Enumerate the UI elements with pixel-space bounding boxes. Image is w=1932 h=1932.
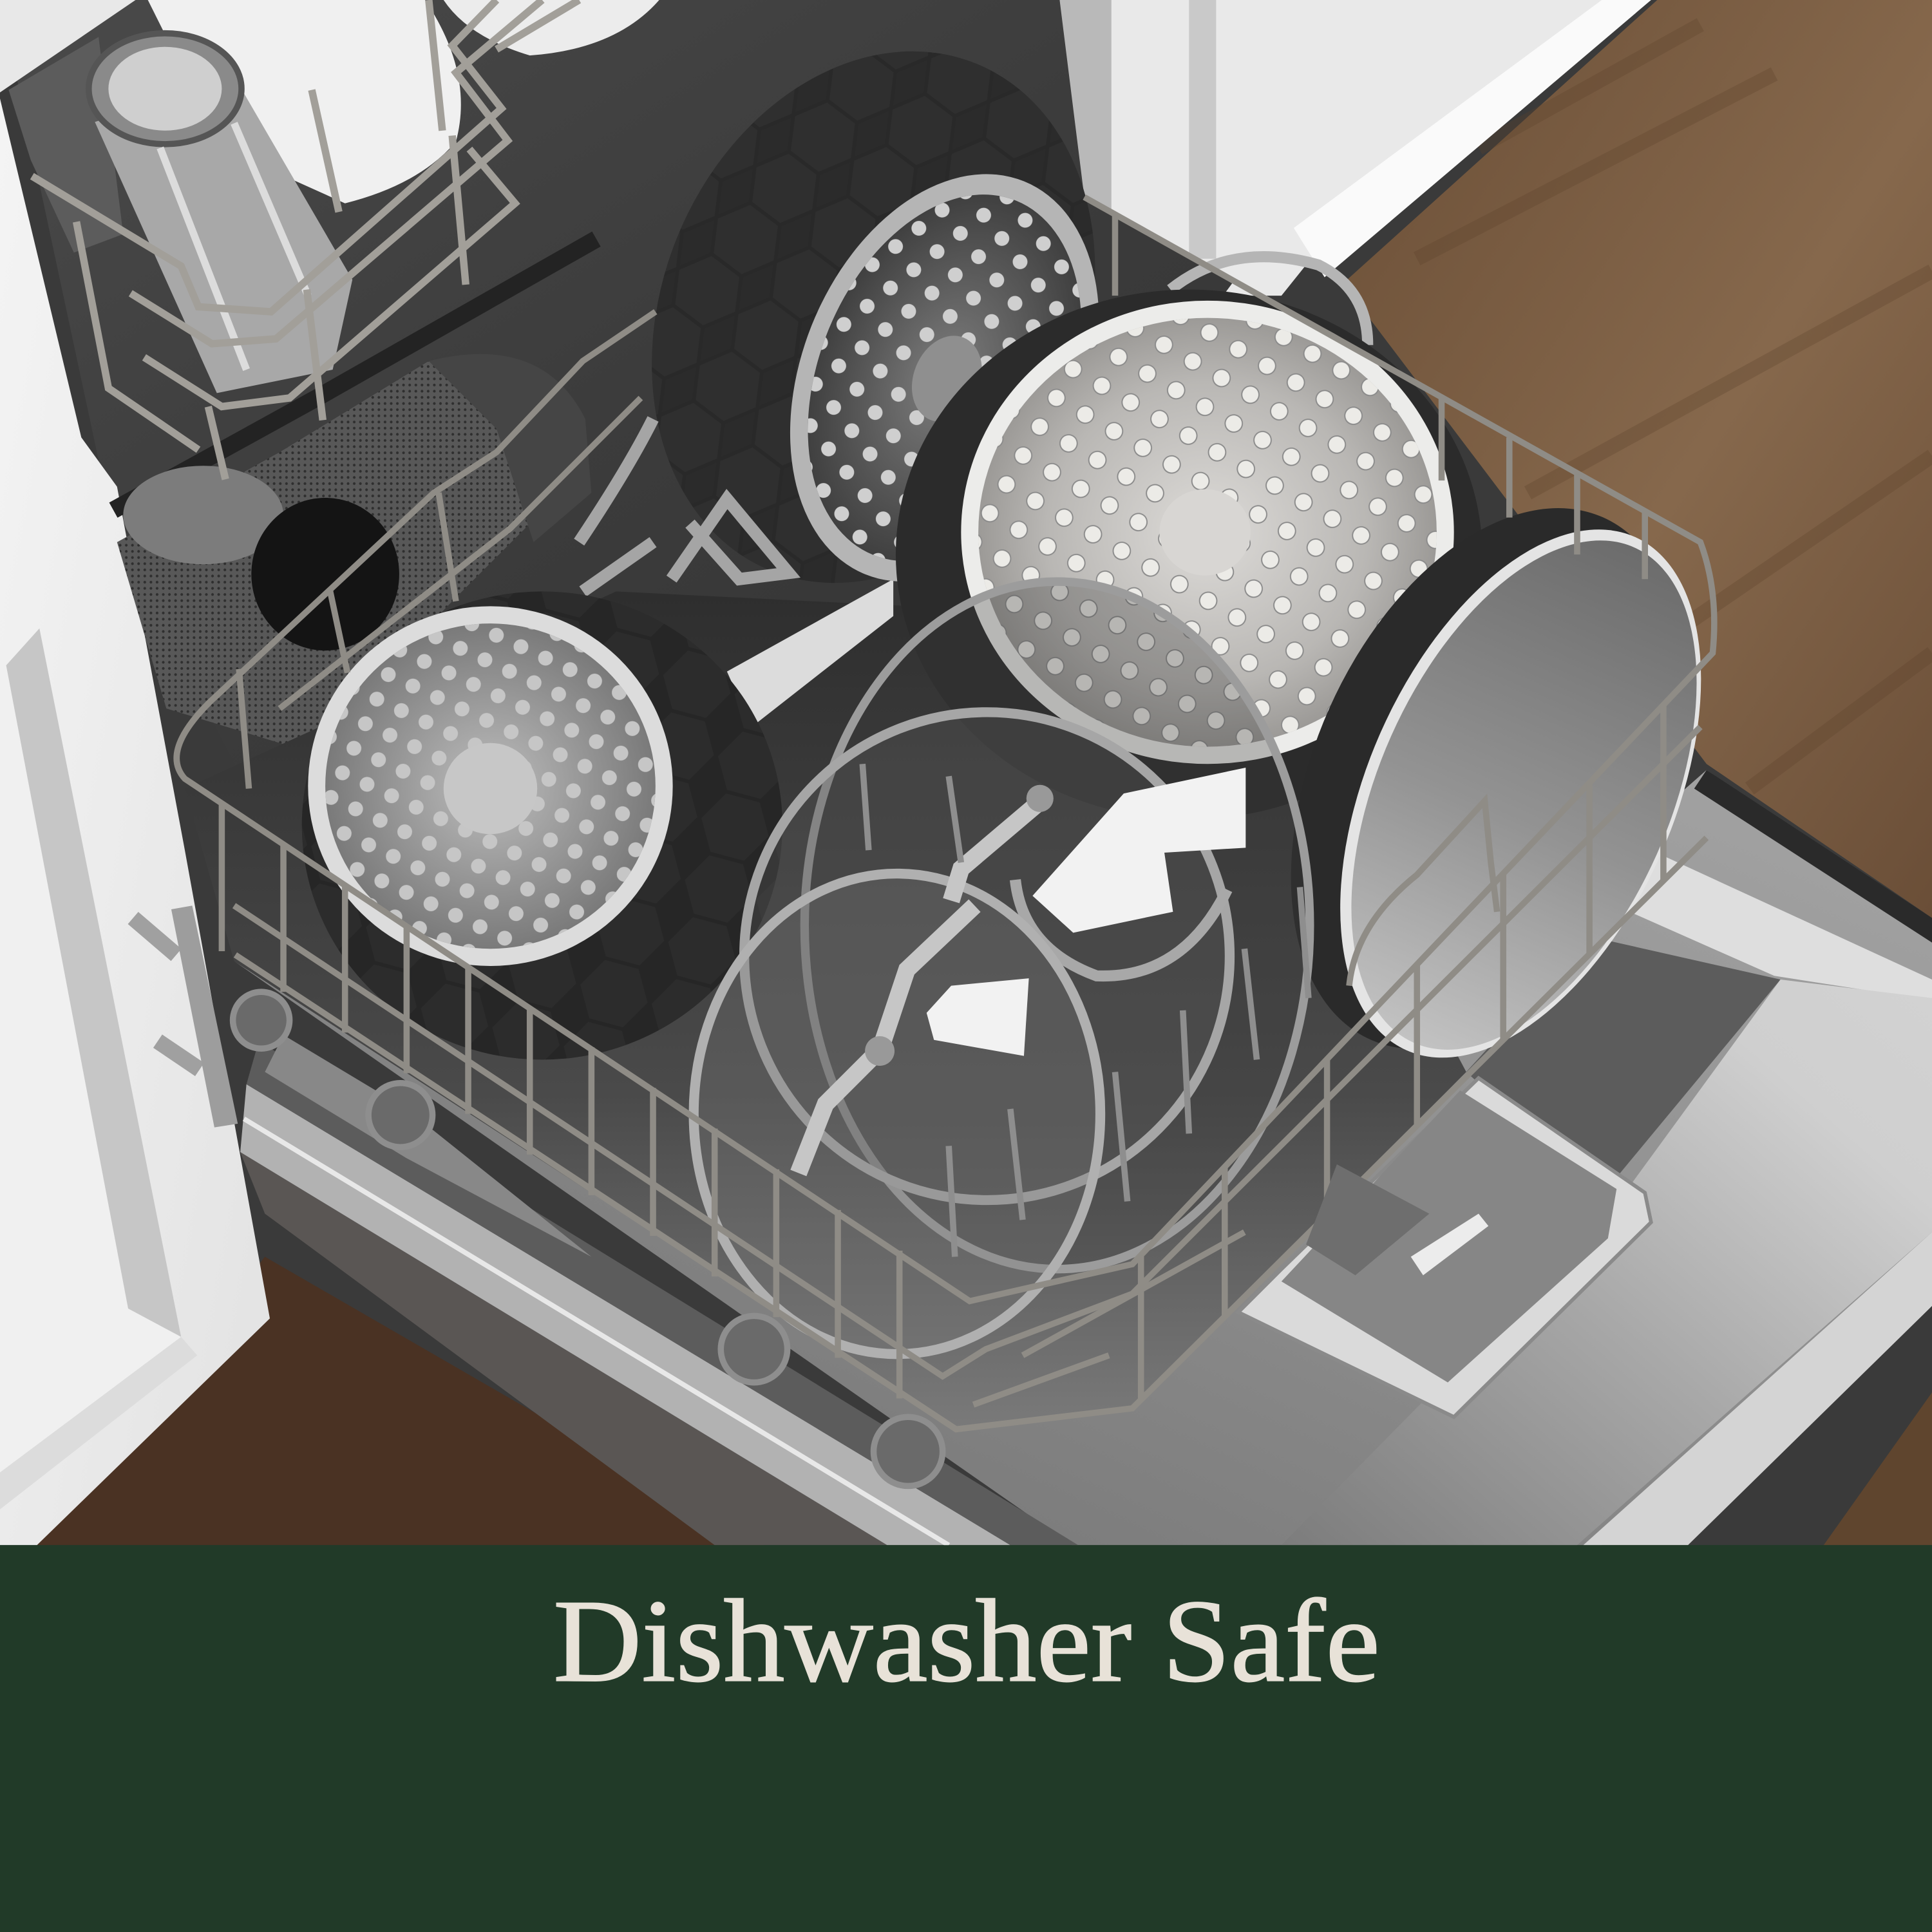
- cabinet door with handle: [0, 0, 270, 1545]
- detergent dispenser: [1238, 1078, 1651, 1417]
- rack wheels: [233, 992, 943, 1486]
- door panel bevel: [0, 629, 181, 1472]
- banner: [0, 1545, 1932, 1932]
- title: Dishwasher Safe: [553, 1575, 1380, 1707]
- pan: top frying pan: [574, 0, 1191, 658]
- plates: [148, 0, 461, 204]
- rack floor: [185, 591, 1466, 1429]
- pan: left saucepan: [302, 591, 782, 1059]
- sump and filter: [117, 361, 533, 752]
- pan: large centre pan: [896, 257, 1482, 819]
- bright panel behind rack: [727, 579, 893, 727]
- stainless steel door: [234, 770, 1932, 1545]
- wires: [32, 0, 579, 479]
- dishwasher interior: [0, 0, 1232, 788]
- spray arm: [113, 239, 596, 510]
- background: wood floor and cabinet: [0, 0, 1932, 1545]
- upper rack with glasses and plate: [8, 0, 659, 752]
- pan: handle between pans: [579, 419, 788, 591]
- glasses: [8, 37, 123, 252]
- glass lids: [694, 582, 1310, 1354]
- pan: right pan interior: [1213, 447, 1777, 1117]
- dishwasher rack: [176, 197, 1714, 1429]
